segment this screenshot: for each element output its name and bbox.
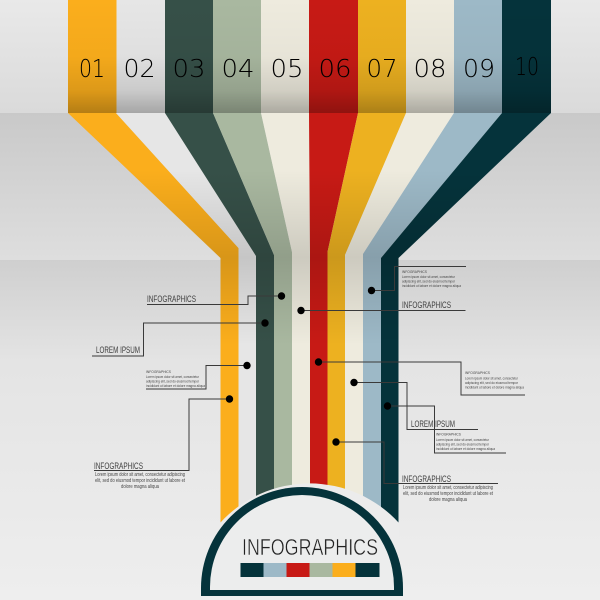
callout: small text upper right: incididunt ut labore et dolore magna aliqua	[402, 284, 461, 288]
colour swatches	[240, 563, 380, 577]
callout: lorem ipsum right	[350, 379, 478, 430]
funnel ribbons	[68, 113, 551, 522]
callout: infographics upper right	[297, 300, 466, 314]
callout: infographics lower left	[94, 395, 233, 490]
numbered colour tabs	[68, 0, 551, 113]
numbered colour tabs: 08	[414, 54, 446, 83]
callout: infographics lower left: Lorem ipsum dolor sit amet, consectetur adipiscing	[95, 472, 185, 478]
numbered colour tabs: 09	[463, 54, 495, 83]
callout: lorem ipsum left	[92, 319, 269, 356]
numbered colour tabs: 01	[79, 54, 105, 83]
numbered colour tabs: 05	[270, 54, 304, 83]
callout: small text lower right: INFOGRAPHICS	[436, 432, 462, 436]
callout: lorem ipsum left: LOREM IPSUM	[96, 345, 140, 355]
callout: infographics lower right: dolore magna aliqua	[429, 497, 467, 503]
callout: lorem ipsum right: LOREM IPSUM	[411, 419, 455, 429]
callout: small text right: Lorem ipsum dolor sit amet, consectetur	[465, 376, 519, 380]
callout: infographics upper right: INFOGRAPHICS	[402, 300, 451, 310]
numbered colour tabs: 06	[318, 54, 352, 83]
callout: infographics lower right: INFOGRAPHICS	[402, 474, 451, 484]
callout: small text right	[315, 358, 525, 395]
numbered colour tabs: 03	[172, 54, 206, 83]
callout: infographics lower right	[332, 438, 498, 503]
callout: small text upper right: Lorem ipsum dolor sit amet, consectetur	[402, 275, 456, 279]
callout: small text right: incididunt ut labore et dolore magna aliqua	[465, 386, 524, 390]
callout: small text right: adipiscing elit, sed do eiusmod tempor	[465, 381, 519, 385]
callout: infographics upper left	[147, 292, 285, 304]
callout: small text left: incididunt ut labore et dolore magna aliqua	[146, 384, 205, 388]
callout: small text left: INFOGRAPHICS	[146, 370, 172, 374]
callout: infographics lower left: elit, sed do eiusmod tempor incididunt ut labore et	[95, 478, 185, 484]
callout: small text lower right: Lorem ipsum dolor sit amet, consectetur	[436, 438, 490, 442]
callout: small text lower right	[384, 402, 506, 453]
numbered colour tabs: 10	[515, 52, 539, 81]
callout: infographics lower left: dolore magna aliqua	[121, 484, 159, 490]
callout: infographics upper left: INFOGRAPHICS	[147, 294, 196, 304]
callout: small text upper right	[368, 266, 466, 294]
numbered colour tabs: 04	[222, 54, 254, 83]
numbered colour tabs: 02	[124, 54, 156, 83]
numbered colour tabs: 07	[366, 54, 398, 83]
callout: small text upper right: INFOGRAPHICS	[402, 270, 428, 274]
callout: small text lower right: adipiscing elit, sed do eiusmod tempor	[436, 442, 490, 446]
callout: infographics lower left: INFOGRAPHICS	[94, 461, 143, 471]
callout: small text right: INFOGRAPHICS	[465, 371, 491, 375]
dome title: INFOGRAPHICS	[242, 534, 378, 560]
callout: infographics lower right: elit, sed do eiusmod tempor incididunt ut labore et	[403, 491, 493, 497]
callout: small text left: adipiscing elit, sed do eiusmod tempor	[146, 380, 200, 384]
dome badge	[201, 483, 403, 596]
callout: infographics lower right: Lorem ipsum dolor sit amet, consectetur adipiscing	[403, 485, 493, 491]
callout: small text left	[146, 362, 251, 389]
callout: small text left: Lorem ipsum dolor sit amet, consectetur	[146, 375, 200, 379]
callout: small text upper right: adipiscing elit, sed do eiusmod tempor	[402, 280, 456, 284]
callout: small text lower right: incididunt ut labore et dolore magna aliqua	[436, 447, 495, 451]
